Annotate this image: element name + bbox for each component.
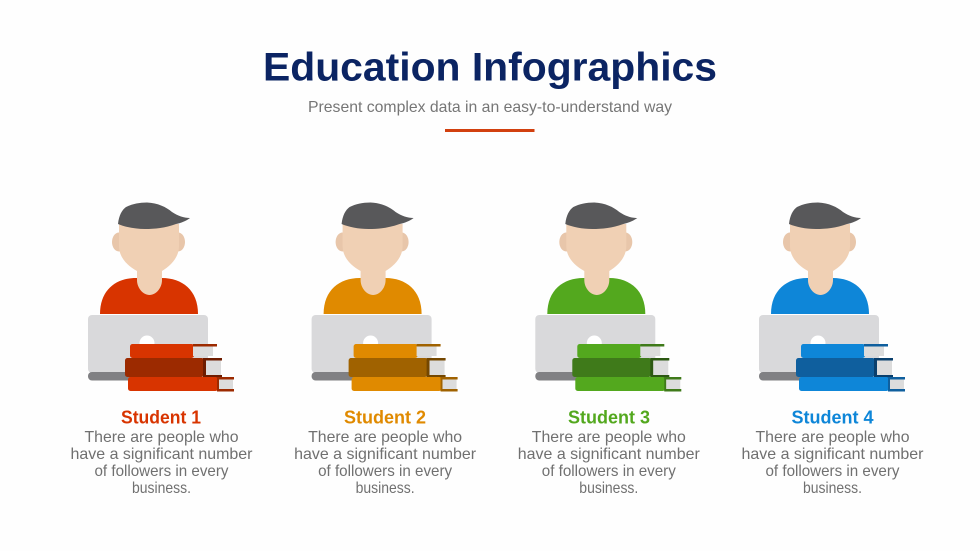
panel: student 1 xyxy=(70,202,253,497)
description: have a significant number xyxy=(742,446,924,463)
icon: student with laptop and books xyxy=(312,202,458,392)
description: business. xyxy=(132,480,191,497)
description: business. xyxy=(803,480,862,497)
panel: student 2 xyxy=(294,202,477,497)
description: of followers in every xyxy=(318,463,452,480)
title: Education Infographics xyxy=(263,46,717,90)
title accent line xyxy=(445,129,534,132)
heading: Student 3 xyxy=(568,408,650,428)
description: There are people who xyxy=(532,429,686,446)
subtitle: Present complex data in an easy-to-understand way xyxy=(308,99,672,116)
description xyxy=(742,429,924,497)
description xyxy=(70,429,253,497)
description: have a significant number xyxy=(70,446,253,463)
heading: Student 2 xyxy=(344,408,426,428)
panel: student 3 xyxy=(518,202,700,497)
description: of followers in every xyxy=(94,463,228,480)
description: of followers in every xyxy=(766,463,900,480)
icon: student with laptop and books xyxy=(759,202,905,392)
icon: student with laptop and books xyxy=(535,202,681,392)
description xyxy=(294,429,477,497)
description: business. xyxy=(579,480,638,497)
description: of followers in every xyxy=(542,463,676,480)
description: There are people who xyxy=(756,429,910,446)
description: There are people who xyxy=(308,429,462,446)
description: have a significant number xyxy=(294,446,477,463)
icon: student with laptop and books xyxy=(88,202,234,392)
heading: Student 1 xyxy=(121,408,201,428)
description xyxy=(518,429,700,497)
description: business. xyxy=(356,480,415,497)
panel: student 4 xyxy=(742,202,924,497)
description: have a significant number xyxy=(518,446,700,463)
description: There are people who xyxy=(84,429,239,446)
heading: Student 4 xyxy=(792,408,874,428)
